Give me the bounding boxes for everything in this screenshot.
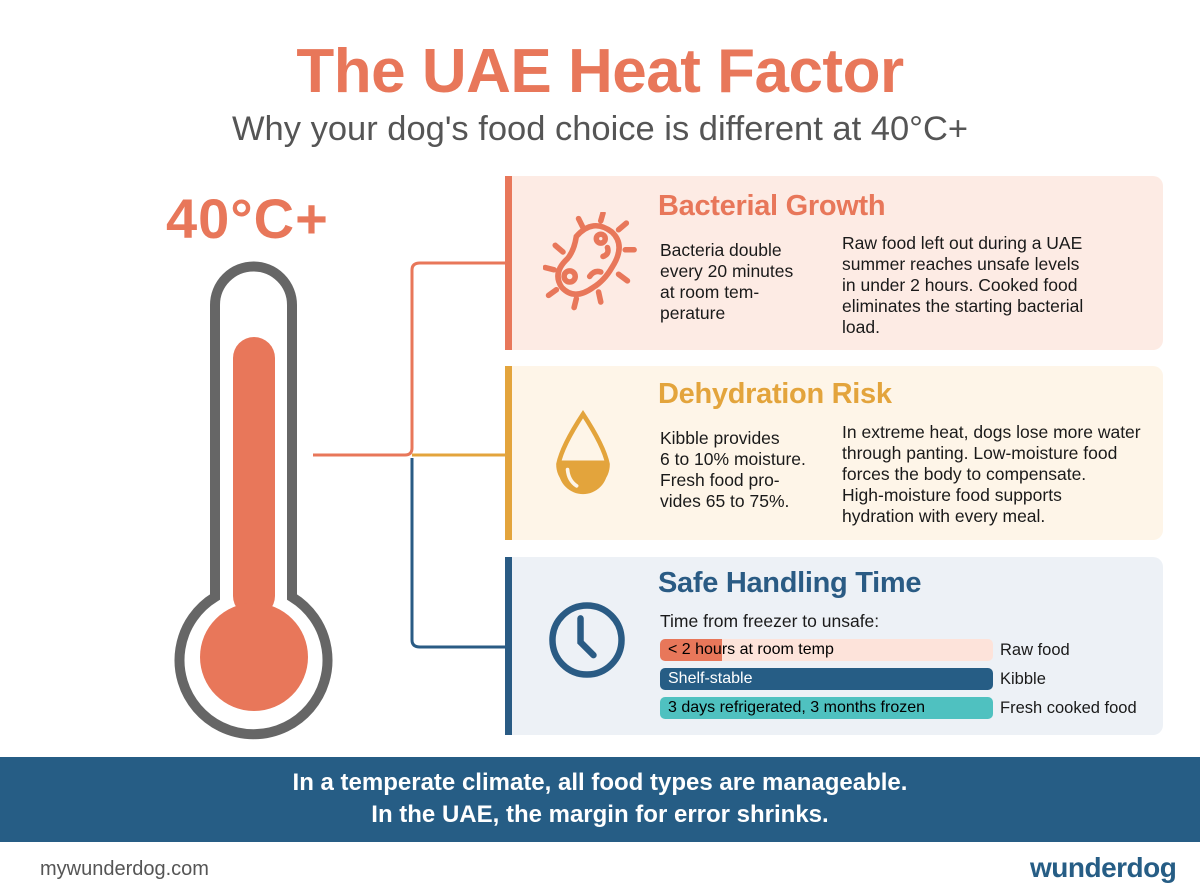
icon: clock — [549, 602, 625, 678]
banner: In a temperate climate, all food types are manageable. — [293, 769, 907, 796]
text: right: through panting. Low-moisture food — [842, 443, 1117, 463]
text: right: High-moisture food supports — [842, 485, 1062, 505]
text: right: Raw food left out during a UAE — [842, 233, 1082, 253]
text: left: Kibble provides — [660, 428, 780, 448]
bar: kibble: Shelf-stable — [668, 670, 752, 687]
heading: Dehydration Risk — [658, 378, 892, 410]
bar: raw food — [660, 639, 993, 661]
panel: safe handling time: Fresh cooked food — [1000, 699, 1137, 717]
panel: bacterial growth — [505, 176, 1163, 350]
text: right: summer reaches unsafe levels — [842, 254, 1079, 274]
connector lines — [313, 262, 505, 648]
bar: kibble — [660, 668, 993, 690]
heading: Safe Handling Time — [658, 567, 921, 599]
footer url: mywunderdog.com — [40, 858, 209, 880]
icon: water drop — [556, 410, 610, 494]
bar: raw food: < 2 hours at room temp — [668, 641, 834, 658]
text: left: perature — [660, 303, 725, 323]
heading: Bacterial Growth — [658, 190, 885, 222]
banner — [0, 757, 1200, 842]
panel: safe handling time — [505, 557, 1163, 735]
text: left: 6 to 10% moisture. — [660, 449, 806, 469]
text: right: In extreme heat, dogs lose more water — [842, 422, 1141, 442]
panel: safe handling time: Raw food — [1000, 641, 1070, 659]
text: left: at room tem- — [660, 282, 759, 302]
subtitle: Why your dog's food choice is different at 40°C+ — [232, 110, 968, 148]
title: The UAE Heat Factor — [296, 37, 904, 106]
text: right: hydration with every meal. — [842, 506, 1045, 526]
text: left: every 20 minutes — [660, 261, 793, 281]
logo: wunderdog — [1030, 852, 1176, 883]
bar: fresh cooked — [660, 697, 993, 719]
text: right — [842, 233, 1083, 337]
text: left — [660, 428, 806, 511]
text: right: load. — [842, 317, 880, 337]
text: right: in under 2 hours. Cooked food — [842, 275, 1077, 295]
text: left: vides 65 to 75%. — [660, 491, 789, 511]
text: right — [842, 422, 1141, 526]
panel: dehydration risk — [505, 366, 1163, 540]
panel: safe handling time: Kibble — [1000, 670, 1046, 688]
bar: fresh cooked: 3 days refrigerated, 3 months frozen — [668, 699, 925, 716]
temperature label: 40°C+ — [166, 187, 329, 250]
text: right: eliminates the starting bacterial — [842, 296, 1083, 316]
text: intro: Time from freezer to unsafe: — [660, 611, 879, 631]
text: left — [660, 240, 793, 323]
text: left: Bacteria double — [660, 240, 782, 260]
text: right: forces the body to compensate. — [842, 464, 1086, 484]
banner: In the UAE, the margin for error shrinks. — [371, 801, 829, 828]
thermometer — [174, 262, 332, 740]
text: left: Fresh food pro- — [660, 470, 780, 490]
icon: bacteria — [543, 212, 637, 310]
